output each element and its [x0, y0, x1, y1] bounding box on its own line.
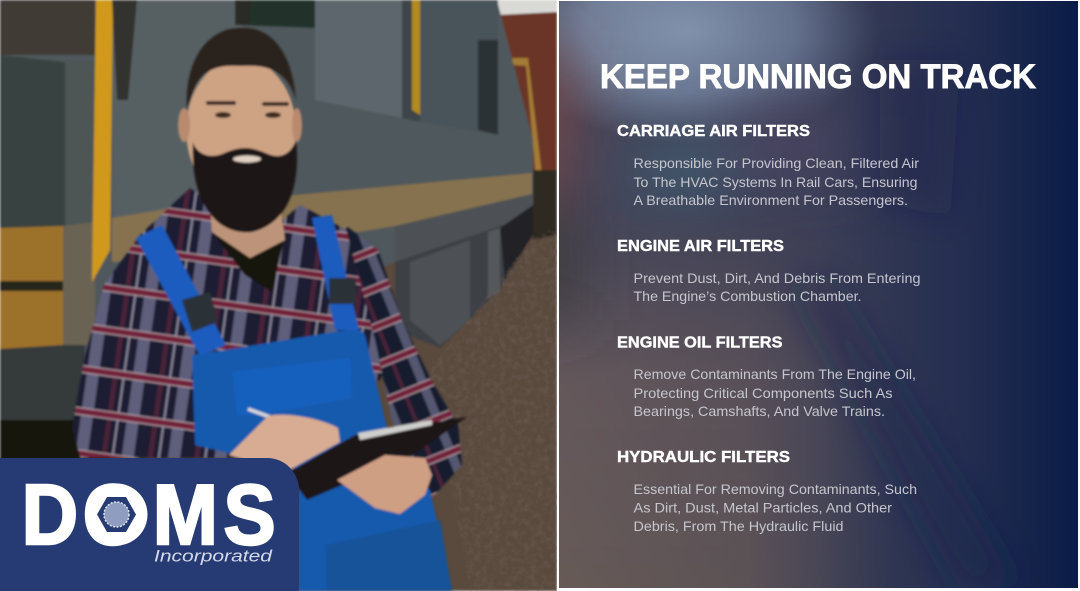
panel: blurred railway background — [510, 1, 1078, 588]
body: engine air filters: Prevent Dust, Dirt, And Debris From Entering — [634, 271, 920, 286]
section: engine air filters — [617, 238, 920, 304]
overalls — [192, 328, 452, 591]
section: carriage air filters — [617, 123, 919, 208]
body: carriage air filters: To The HVAC Systems In Rail Cars, Ensuring — [634, 175, 918, 190]
logo icon: hex nut with mesh sphere — [86, 484, 148, 546]
beard — [193, 140, 297, 232]
eyes and brows — [206, 101, 289, 118]
heading: engine air filters: ENGINE AIR FILTERS — [617, 238, 784, 255]
heading: engine oil filters: ENGINE OIL FILTERS — [617, 334, 782, 352]
shirt torso and left arm — [72, 188, 400, 458]
section: engine oil filters — [617, 334, 916, 419]
overall straps — [136, 225, 226, 356]
heading: hydraulic filters: HYDRAULIC FILTERS — [617, 449, 790, 466]
logo panel — [0, 458, 299, 591]
neck — [210, 205, 285, 258]
smile — [233, 156, 261, 162]
heading: carriage air filters: CARRIAGE AIR FILTERS — [617, 123, 810, 140]
blurred sky tone — [559, 1, 865, 134]
navy gradient overlay — [559, 1, 1078, 588]
body: engine oil filters: Bearings, Camshafts, And Valve Trains. — [634, 404, 885, 419]
writing hand — [229, 415, 340, 472]
pen — [248, 409, 270, 417]
clipboard — [287, 417, 467, 500]
photo background: gravel, wagon and locomotive — [0, 0, 557, 591]
title: KEEP RUNNING ON TRACK — [600, 58, 1036, 96]
worker figure — [72, 28, 467, 591]
shirt right sleeve — [345, 225, 462, 498]
blurred floor tone — [559, 244, 852, 588]
body: engine air filters — [634, 271, 920, 304]
body: carriage air filters — [634, 156, 919, 208]
section: hydraulic filters — [617, 449, 917, 534]
body: carriage air filters: A Breathable Environment For Passengers. — [634, 193, 908, 208]
photo: railway worker beside locomotive — [0, 0, 557, 591]
holding hand — [337, 455, 432, 514]
body: hydraulic filters: Debris, From The Hydraulic Fluid — [634, 519, 844, 534]
black t-shirt — [212, 232, 285, 292]
body: hydraulic filters — [634, 482, 917, 534]
body: hydraulic filters: Essential For Removing Contaminants, Such — [634, 482, 917, 497]
blurred colour masses — [510, 50, 850, 320]
logo tagline: Incorporated — [154, 546, 273, 566]
body: hydraulic filters: As Dirt, Dust, Metal Particles, And Other — [634, 500, 893, 516]
gravel texture — [432, 225, 557, 591]
head — [185, 64, 296, 167]
blurred diagonal track shadows — [793, 275, 951, 565]
hair — [187, 28, 296, 110]
body: engine oil filters: Protecting Critical Components Such As — [634, 386, 893, 401]
body: engine oil filters: Remove Contaminants From The Engine Oil, — [634, 367, 916, 382]
body: engine air filters: The Engine’s Combustion Chamber. — [634, 289, 862, 304]
body: carriage air filters: Responsible For Providing Clean, Filtered Air — [634, 156, 919, 171]
body: engine oil filters — [634, 367, 916, 419]
logo wordmark: DOMS — [22, 468, 276, 563]
